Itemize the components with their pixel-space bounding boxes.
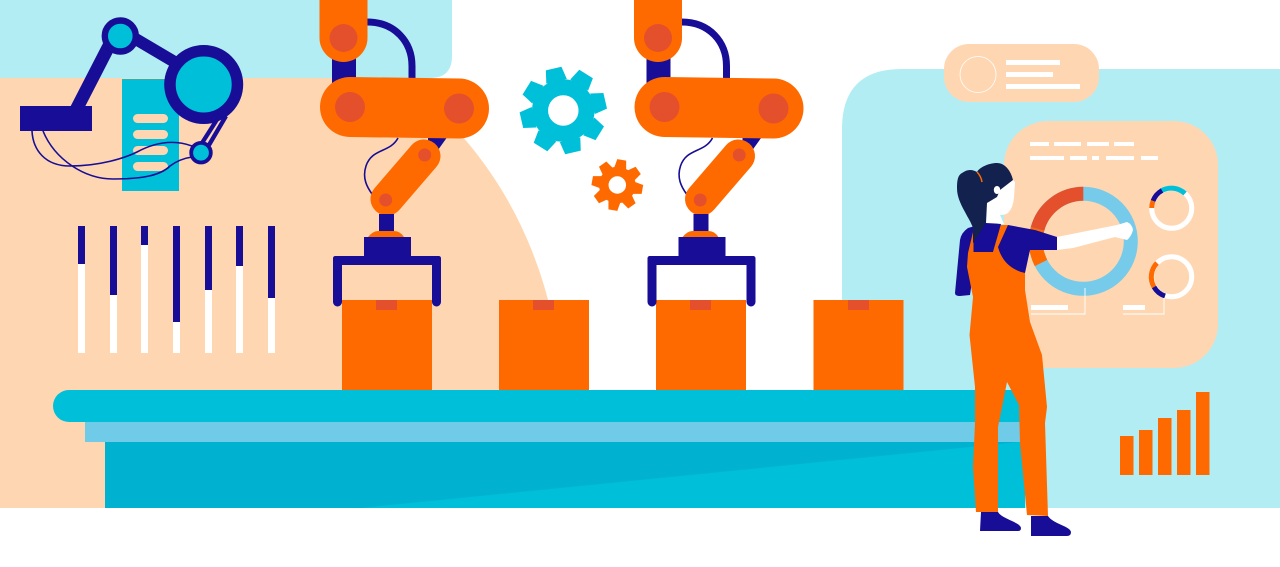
navy shirt bib (974, 222, 1001, 252)
slider bars (78, 226, 275, 353)
left robot arm with panel (20, 20, 237, 191)
robot joint large (170, 51, 237, 118)
hair tie (977, 172, 982, 182)
main arm joints (650, 92, 788, 124)
face and neck (986, 170, 1015, 224)
upper joint (644, 24, 672, 52)
main arm (350, 107, 459, 108)
robot joint top (105, 20, 136, 52)
icon: small orange gear (591, 159, 643, 211)
overalls (967, 225, 1048, 516)
robot joint small (191, 143, 211, 162)
forearm (702, 156, 738, 199)
main arm (664, 107, 774, 108)
forearm joints (694, 148, 746, 206)
white arm and hand (1057, 222, 1133, 250)
hoses and connectors (332, 22, 448, 194)
bar chart (1120, 392, 1210, 475)
navy sleeve (998, 225, 1057, 273)
background: light blue top-left panel (0, 0, 452, 78)
small donut chart top (1152, 188, 1192, 228)
robot arm 1 (320, 0, 474, 306)
background: peach area left (0, 78, 553, 508)
upper joint (330, 24, 358, 52)
dashboard text lines (1030, 142, 1158, 160)
hoses and connectors (646, 22, 762, 194)
robot base (20, 106, 92, 131)
upper arm (320, 0, 368, 62)
shoes (980, 512, 1071, 536)
gripper (647, 214, 756, 306)
upper arm (634, 0, 682, 62)
hair (957, 163, 1013, 243)
background: light blue right panel (842, 69, 1280, 508)
back arm (955, 223, 986, 296)
robot arm segments (32, 38, 226, 179)
boxes (342, 300, 904, 390)
ear (994, 186, 1000, 194)
robot arm 2 (634, 0, 788, 306)
woman operator (955, 163, 1133, 536)
small donut chart bottom (1151, 257, 1192, 297)
conveyor belt (53, 390, 1025, 508)
forearm (387, 156, 424, 199)
chart labels (1031, 288, 1164, 314)
teal control panel (122, 79, 179, 191)
icon: large teal gear (519, 66, 608, 155)
forearm joints (379, 148, 431, 206)
header pill card (944, 44, 1099, 102)
dashboard panel (1004, 121, 1218, 368)
main arm joints (335, 92, 474, 124)
large donut chart (1036, 194, 1131, 289)
gripper (333, 214, 441, 306)
